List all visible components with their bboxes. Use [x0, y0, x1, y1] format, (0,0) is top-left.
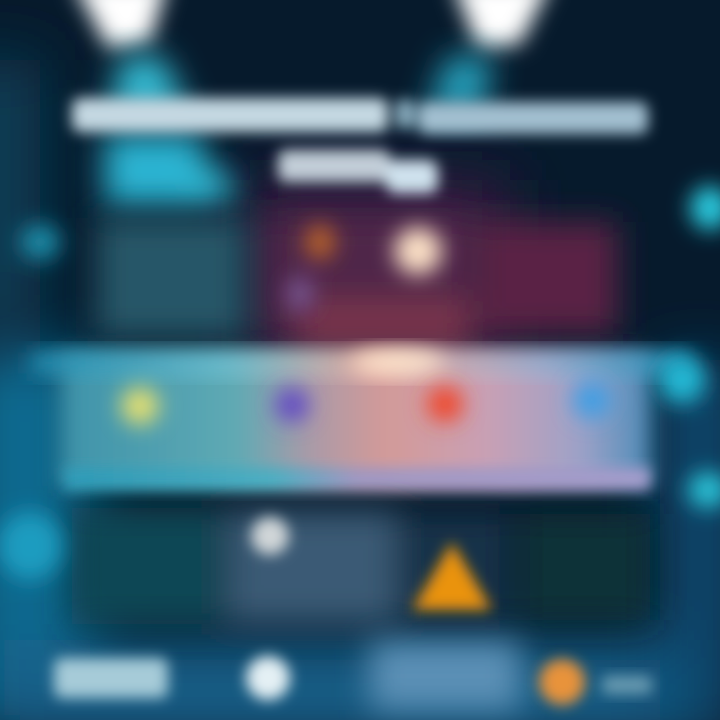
icon: warning triangle	[412, 542, 492, 610]
right beam	[426, 56, 492, 114]
band top glow	[30, 352, 690, 374]
icon: right ceiling light	[452, 0, 552, 48]
row 1 icons	[286, 224, 442, 312]
icon: white circle	[251, 517, 289, 555]
panel: left	[96, 218, 246, 338]
icon: red	[427, 386, 463, 422]
icon: purple	[286, 276, 314, 312]
panel: dark green	[520, 514, 650, 620]
panel: middle	[268, 216, 468, 340]
panel: dark teal	[72, 508, 222, 624]
row 2 icons	[121, 381, 611, 425]
icon: orange circle	[539, 659, 585, 705]
side glows	[0, 186, 720, 580]
panel: right	[476, 222, 618, 334]
panel: dark centre	[402, 514, 508, 620]
icon: peach light	[394, 227, 442, 275]
row 3 panels	[72, 508, 650, 624]
left beam	[108, 56, 190, 114]
right upper glow	[690, 186, 720, 230]
icon: white circle	[246, 656, 290, 700]
row 1 panels	[96, 216, 618, 350]
row 2 band	[30, 350, 690, 490]
title	[72, 98, 648, 194]
title line 2	[278, 150, 390, 182]
icon: blue	[573, 381, 611, 419]
title line 1	[72, 98, 388, 132]
icon: purple	[275, 388, 309, 422]
bright centre highlight	[352, 350, 444, 374]
middle panel lower glow	[300, 300, 470, 350]
row 3 icons	[251, 517, 492, 610]
left upper glow	[20, 224, 60, 260]
panel: slate	[226, 510, 398, 624]
row 4 footer	[54, 642, 652, 710]
panel: wide band	[60, 354, 652, 486]
right lower glow	[688, 472, 720, 508]
icon: yellow	[121, 387, 159, 425]
icon: orange	[305, 224, 335, 260]
light beams	[108, 56, 492, 114]
left lower glow	[0, 512, 62, 580]
bottom strip	[64, 468, 650, 490]
icon: left ceiling light	[72, 0, 168, 48]
right middle glow	[658, 356, 706, 404]
footer label	[602, 676, 652, 694]
footer panel: blue	[370, 642, 520, 710]
cyan glow under the title	[104, 134, 234, 206]
ceiling lights	[72, 0, 552, 48]
footer text block	[54, 658, 168, 698]
